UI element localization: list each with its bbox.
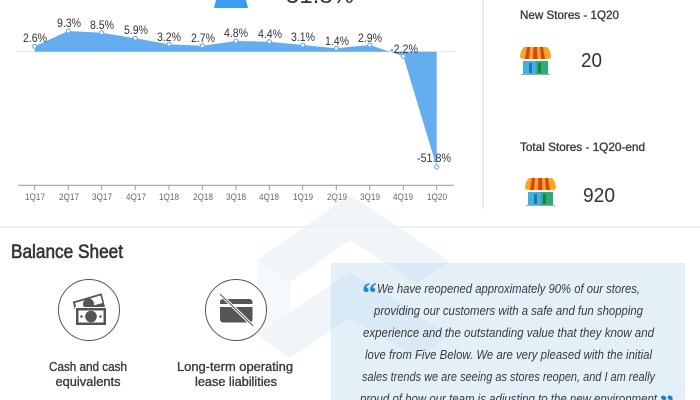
data labels: 8.5%: [90, 18, 114, 32]
value: new stores: 20: [581, 50, 602, 72]
x axis labels: 4Q18: [259, 192, 279, 202]
x axis labels: 3Q17: [92, 192, 112, 202]
area chart: comparable sales by quarter: [16, 16, 456, 202]
item: long-term operating lease liabilities: [177, 280, 293, 389]
icon: crossed credit card: [206, 280, 266, 340]
zero baseline: [16, 51, 456, 53]
icon: banknotes: [58, 280, 120, 340]
vertical divider: [482, 0, 484, 209]
x axis labels: 4Q19: [393, 192, 413, 202]
x axis labels: 3Q18: [226, 192, 246, 202]
label: equivalents: [56, 375, 120, 389]
data labels: 3.1%: [291, 30, 315, 44]
x axis labels: 2Q17: [59, 192, 79, 202]
label: Long-term operating: [177, 360, 293, 374]
data labels: [23, 16, 451, 165]
x axis: [18, 185, 454, 190]
heading: total stores: Total Stores - 1Q20-end: [520, 140, 645, 154]
value: total stores: 920: [583, 185, 615, 207]
x axis labels: 2Q18: [193, 192, 213, 202]
quote text: sales trends we are seeing as stores reopen, and I am really: [362, 369, 656, 384]
data labels: 2.6%: [23, 31, 47, 45]
quote text: providing our customers with a safe and fun shopping: [373, 303, 644, 318]
section divider: [0, 226, 700, 228]
heading: balance sheet: Balance Sheet: [11, 242, 124, 263]
icon: blue trapezoid: [214, 0, 248, 8]
data labels: 2.9%: [358, 31, 382, 45]
watermark logo: [257, 195, 450, 358]
panel: new stores: [520, 8, 619, 75]
data labels: 5.9%: [124, 23, 148, 37]
quote text: love from Five Below. We are very pleased with the initial: [365, 347, 653, 362]
x axis labels: 4Q17: [126, 192, 146, 202]
x axis labels: 1Q18: [159, 192, 179, 202]
quote text: We have reopened approximately 90% of our stores,: [377, 281, 640, 296]
x axis labels: 1Q17: [25, 192, 45, 202]
panel: total stores: [520, 140, 645, 207]
icon: storefront: [520, 47, 551, 75]
opening quote mark: “: [362, 277, 377, 310]
area fill: [35, 31, 437, 167]
x axis labels: 3Q19: [360, 192, 380, 202]
x axis labels: 2Q19: [327, 192, 347, 202]
data labels: 9.3%: [57, 16, 81, 30]
data points: [33, 29, 439, 169]
headline metric: traffic change: [214, 0, 354, 9]
quote text: experience and the outstanding value that they know and: [363, 325, 655, 340]
x axis labels: 1Q20: [427, 192, 447, 202]
data labels: 4.4%: [258, 27, 282, 41]
x axis labels: 1Q19: [293, 192, 313, 202]
item: cash and cash equivalents: [49, 280, 127, 389]
panel: management quote: [331, 263, 685, 400]
data labels: 4.8%: [224, 26, 248, 40]
icon: storefront: [525, 178, 556, 206]
label: lease liabilities: [195, 375, 277, 389]
data labels: 2.7%: [191, 31, 215, 45]
data labels: 3.2%: [157, 30, 181, 44]
heading: new stores: New Stores - 1Q20: [520, 8, 619, 22]
data labels: -51.8%: [417, 151, 451, 165]
x axis labels: [25, 192, 447, 202]
label: Cash and cash: [49, 360, 127, 374]
data labels: -2.2%: [390, 42, 418, 56]
data labels: 1.4%: [325, 34, 349, 48]
